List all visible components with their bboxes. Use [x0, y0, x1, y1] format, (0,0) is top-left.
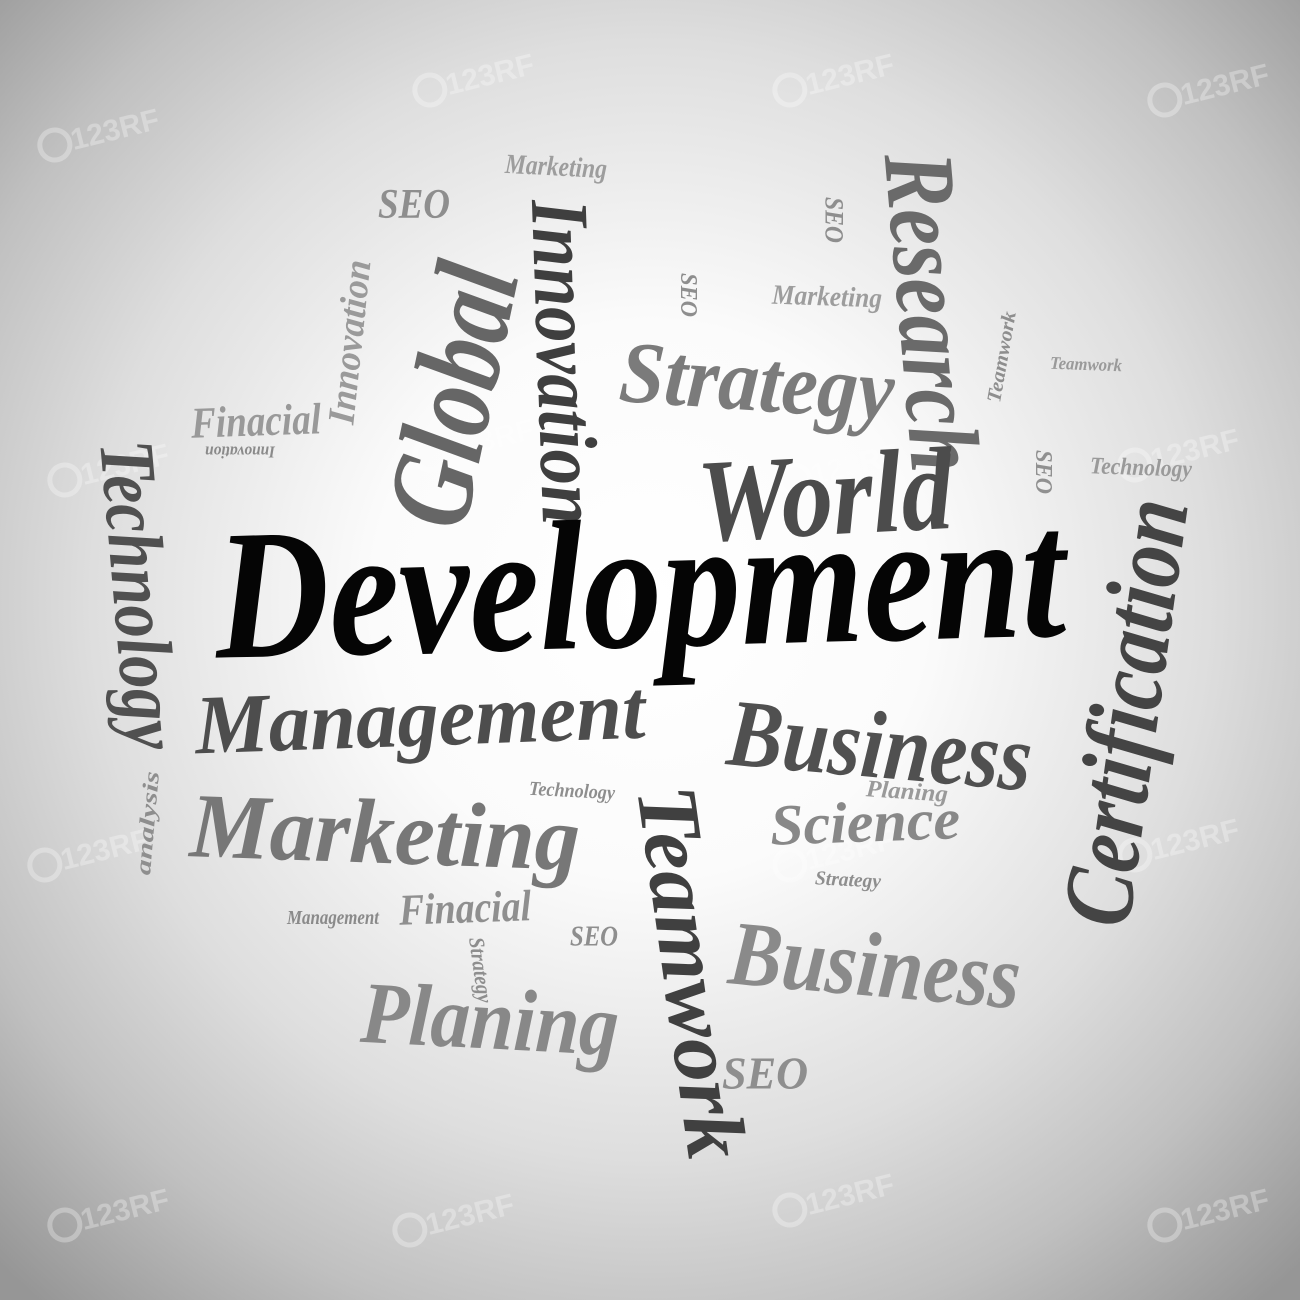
- watermarks: 123RF: [1147, 423, 1243, 477]
- word: Research: Research: [863, 147, 1001, 476]
- word: Strategy: Strategy: [616, 324, 898, 440]
- word: Innovation upside down: Innovation: [205, 442, 276, 462]
- word: Teamwork large: Teamwork: [618, 780, 766, 1164]
- word: World: World: [694, 423, 957, 567]
- word: Marketing large: Marketing: [186, 774, 582, 890]
- word: Marketing middle: Marketing: [771, 280, 883, 314]
- word: SEO rotated inner: SEO: [675, 273, 701, 317]
- word: Teamwork rotated: Teamwork: [983, 310, 1021, 404]
- word: Certification: Certification: [1040, 491, 1210, 933]
- word: Global: Global: [359, 251, 545, 538]
- word: SEO bottom: SEO: [722, 1048, 808, 1098]
- word: Technology center: Technology: [528, 778, 616, 804]
- word: Management small: Management: [286, 907, 380, 929]
- word: SEO rotated upper: SEO: [820, 197, 848, 243]
- word: Finacial upper: Finacial: [189, 394, 322, 448]
- watermarks: 123RF: [57, 823, 153, 877]
- word: Planing small: Planing: [864, 776, 949, 808]
- word: Innovation small: Innovation: [320, 258, 380, 427]
- word: Development (main title): Development: [211, 471, 1071, 699]
- word: Business lower: Business: [724, 901, 1025, 1029]
- watermarks: 123RF: [1177, 1183, 1273, 1237]
- word: Strategy small: Strategy: [814, 867, 882, 893]
- word: analysis rotated: analysis: [130, 770, 164, 876]
- watermarks: 123RF: [802, 48, 898, 102]
- watermarks: 123RF: [802, 823, 898, 877]
- watermarks: 123RF: [1177, 58, 1273, 112]
- watermarks: 123RF: [442, 48, 538, 102]
- word: Planing large: Planing: [358, 965, 621, 1075]
- word: Business upper: Business: [723, 678, 1037, 812]
- word: SEO rotated right: SEO: [1030, 450, 1056, 494]
- word: Innovation large: Innovation: [514, 197, 616, 526]
- word: Teamwork small: Teamwork: [1050, 353, 1122, 375]
- word: Technology large: Technology: [83, 437, 197, 754]
- watermarks: 123RF: [77, 438, 173, 492]
- word: Technology right: Technology: [1090, 453, 1193, 483]
- word: Finacial lower: Finacial: [397, 881, 532, 935]
- word: Management: Management: [192, 664, 649, 772]
- word cloud: [83, 147, 1210, 1164]
- word: SEO lower: SEO: [570, 922, 618, 952]
- watermarks: 123RF: [77, 1183, 173, 1237]
- watermarks: 123RF: [1147, 813, 1243, 867]
- watermarks: 123RF: [807, 438, 903, 492]
- watermarks: 123RF: [422, 1188, 518, 1242]
- watermarks: 123RF: [442, 413, 538, 467]
- word: SEO top: SEO: [378, 182, 450, 228]
- word: Marketing top: Marketing: [503, 149, 608, 185]
- word: Science: Science: [769, 786, 961, 858]
- word: Strategy rotated: Strategy: [464, 936, 498, 1005]
- watermarks: 123RF: [802, 1168, 898, 1222]
- watermarks: 123RF: [67, 103, 163, 157]
